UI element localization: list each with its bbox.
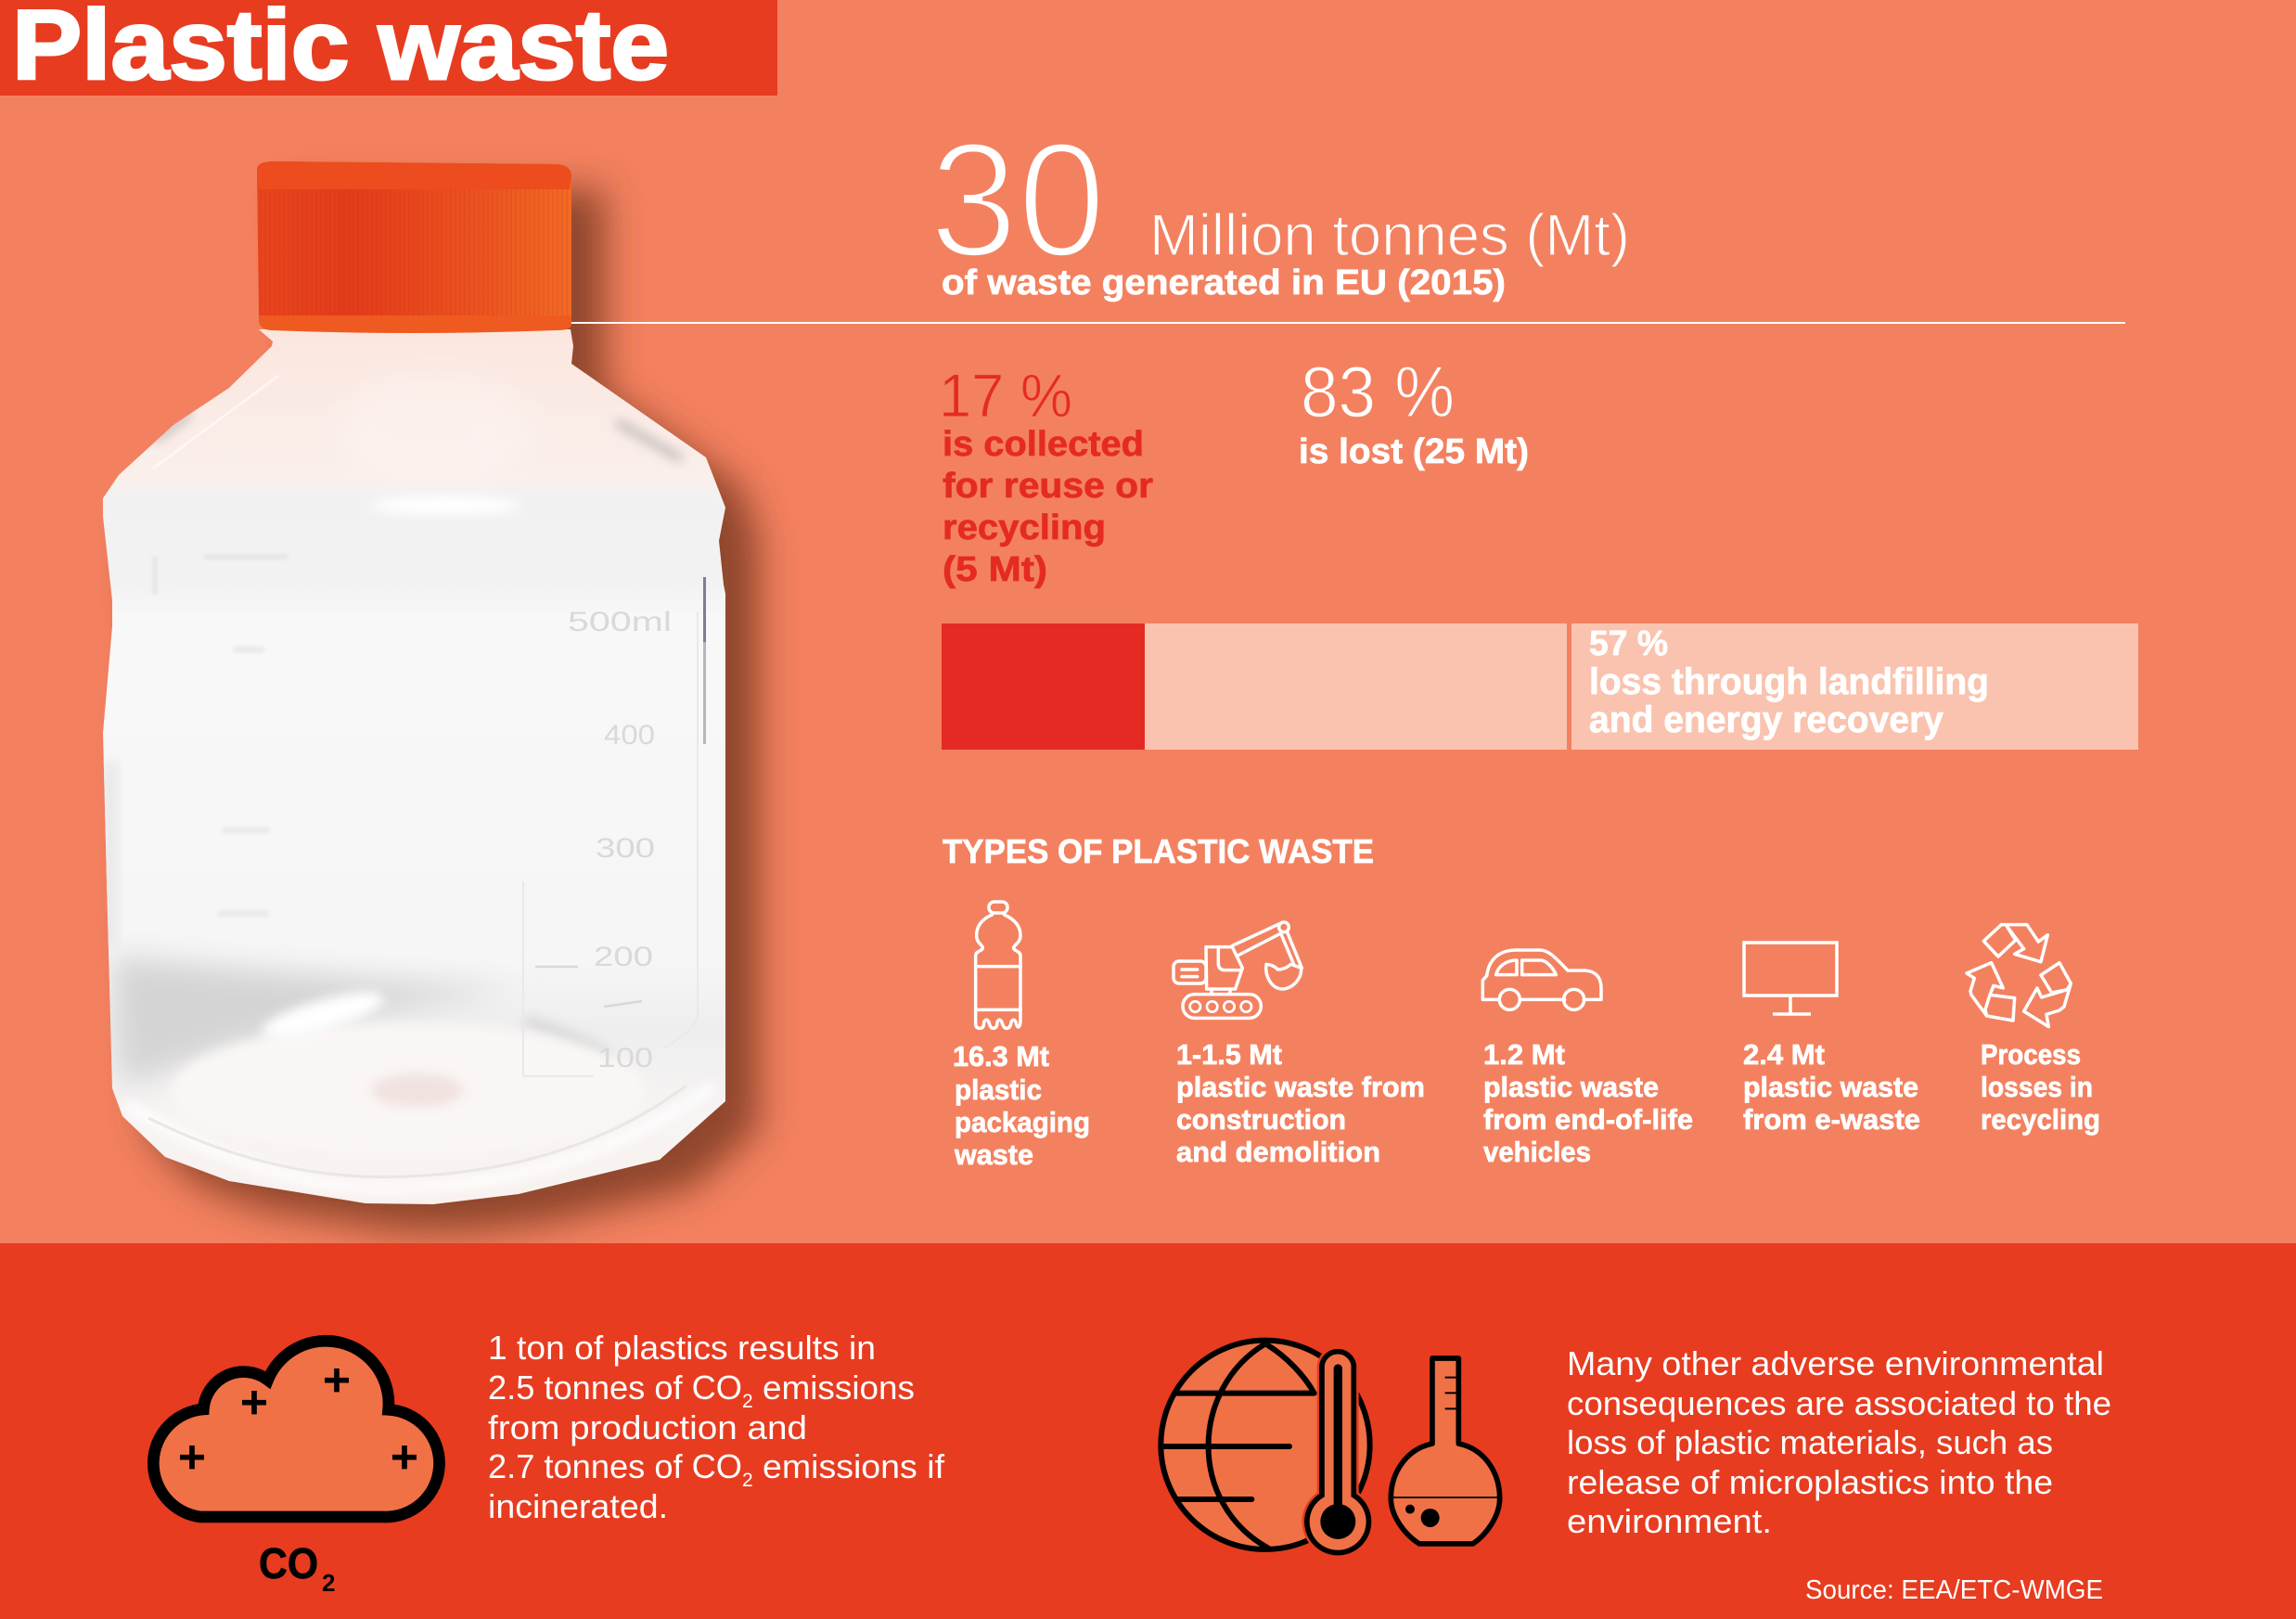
icon: CO2 cloud xyxy=(153,1341,440,1597)
text: vehicle waste: vehicles xyxy=(1483,1136,1591,1168)
bottle volume markings: 400 xyxy=(604,720,655,751)
bottle volume markings: 200 xyxy=(594,942,653,972)
text: CO2 emissions xyxy=(488,1329,945,1525)
text: vehicle waste: 1.2 Mt xyxy=(1483,1038,1565,1071)
bottle volume markings: 500ml xyxy=(568,607,672,637)
text: vehicle waste: from end-of-life xyxy=(1483,1103,1693,1136)
text: recycling losses: recycling xyxy=(1981,1103,2100,1136)
text: construction waste: plastic waste from xyxy=(1176,1071,1425,1103)
flask xyxy=(1391,1358,1500,1544)
text: construction waste: and demolition xyxy=(1176,1136,1380,1168)
text: CO2 emissions: incinerated. xyxy=(488,1487,668,1525)
icon: globe with thermometer and flask xyxy=(1161,1341,1500,1553)
text: CO2 emissions: 1 ton of plastics results in xyxy=(488,1329,876,1367)
headline: 30 million tonnes: 30 xyxy=(930,109,1106,291)
icon: CO2 cloud: CO xyxy=(259,1539,318,1587)
text: recycling losses: Process xyxy=(1981,1038,2081,1071)
icon: excavator xyxy=(1174,922,1302,1018)
bottle volume markings: 100 xyxy=(597,1043,653,1073)
thermometer xyxy=(1307,1352,1368,1553)
icon: CO2 cloud: 2 xyxy=(322,1569,335,1597)
icon: car xyxy=(1482,950,1601,1009)
bottle body xyxy=(103,329,725,1204)
statistic: 17 % collected: 17 % xyxy=(939,361,1072,430)
text: construction waste: 1-1.5 Mt xyxy=(1176,1038,1282,1071)
stacked bar: share of waste: 57 % xyxy=(1589,624,1668,663)
bottle cap xyxy=(257,161,571,333)
statistic: 83 % lost: is lost (25 Mt) xyxy=(1299,432,1529,471)
stacked bar: share of waste: loss through landfilling xyxy=(1589,662,1989,702)
stacked bar: share of waste: and energy recovery xyxy=(1589,700,1944,740)
text: packaging waste: packaging xyxy=(955,1106,1090,1138)
photo: plastic bottle with orange cap xyxy=(103,161,759,1232)
statistic: 17 % collected: for reuse or xyxy=(943,467,1153,506)
bottle highlights and glass shading xyxy=(103,371,714,1189)
bottle drop shadow xyxy=(136,189,759,1232)
text: vehicle waste: plastic waste xyxy=(1483,1071,1659,1103)
text: CO2 emissions: from production and xyxy=(488,1408,807,1446)
bottle volume markings: 300 xyxy=(596,833,655,864)
globe xyxy=(1161,1341,1370,1549)
text: CO2 emissions: emissions xyxy=(763,1368,915,1407)
bottom panel xyxy=(0,1243,2296,1619)
text: CO2 emissions: 2.5 tonnes of CO xyxy=(488,1368,742,1407)
icon: monitor for e-waste xyxy=(1744,943,1837,1014)
text: CO2 emissions: 2.7 tonnes of CO xyxy=(488,1447,742,1485)
statistic: 83 % lost xyxy=(1299,351,1529,471)
text: e-waste: from e-waste xyxy=(1743,1103,1920,1136)
text: construction waste xyxy=(1176,1038,1425,1168)
text: packaging waste xyxy=(953,1040,1090,1171)
icon: plastic bottle xyxy=(976,902,1020,1028)
text: recycling losses: losses in xyxy=(1981,1071,2093,1103)
text: e-waste: 2.4 Mt xyxy=(1743,1038,1825,1071)
text: other environmental consequences: Many other adverse environmental xyxy=(1567,1344,2104,1382)
heading: types of plastic waste: TYPES OF PLASTIC WASTE xyxy=(943,832,1374,870)
headline: 30 million tonnes: of waste generated in EU (2015) xyxy=(942,263,1506,302)
text: other environmental consequences: release of microplastics into the xyxy=(1567,1463,2053,1501)
text: other environmental consequences xyxy=(1567,1344,2111,1540)
text: packaging waste: waste xyxy=(954,1138,1033,1171)
text: vehicle waste xyxy=(1483,1038,1693,1168)
statistic: 83 % lost: 83 % xyxy=(1301,351,1455,432)
text: recycling losses xyxy=(1981,1038,2100,1136)
stacked bar: share of waste xyxy=(942,623,2138,750)
text: other environmental consequences: loss of plastic materials, such as xyxy=(1567,1423,2053,1461)
text: CO2 emissions: 2 xyxy=(742,1391,753,1412)
text: e-waste: plastic waste xyxy=(1743,1071,1918,1103)
text: packaging waste: plastic xyxy=(955,1073,1042,1106)
text: other environmental consequences: consequences are associated to the xyxy=(1567,1384,2111,1422)
divider rule xyxy=(571,322,2125,324)
statistic: 17 % collected xyxy=(939,361,1153,589)
text: CO2 emissions: emissions if xyxy=(763,1447,945,1485)
text: CO2 emissions: 2 xyxy=(742,1470,753,1491)
statistic: 17 % collected: recycling xyxy=(943,508,1106,547)
headline: 30 million tonnes xyxy=(930,109,1630,302)
source line: Source: EEA/ETC-WMGE xyxy=(1805,1575,2103,1605)
bottle volume markings xyxy=(568,607,672,1073)
text: e-waste xyxy=(1743,1038,1920,1136)
icon: recycling arrows xyxy=(1967,925,2071,1027)
headline: 30 million tonnes: Million tonnes (Mt) xyxy=(1149,203,1630,268)
text: construction waste: construction xyxy=(1176,1103,1346,1136)
statistic: 17 % collected: is collected xyxy=(943,425,1144,464)
text: other environmental consequences: environment. xyxy=(1567,1502,1772,1540)
statistic: 17 % collected: (5 Mt) xyxy=(943,550,1047,589)
text: packaging waste: 16.3 Mt xyxy=(953,1040,1049,1073)
